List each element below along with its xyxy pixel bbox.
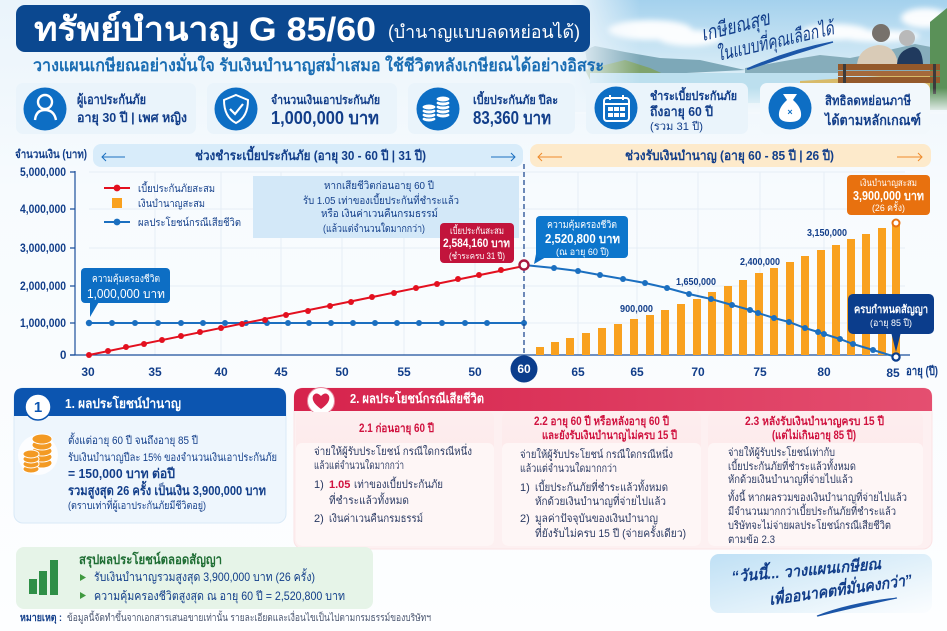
icon: shield <box>214 88 258 130</box>
banner: premium payment period: ช่วงชำระเบี้ยประกันภัย (อายุ 30 - 60 ปี | 31 ปี) <box>195 145 426 164</box>
sub-panel 2.1 <box>296 412 494 546</box>
y axis: 5,000,000 <box>20 167 66 179</box>
sub-panel 2.2: จ่ายให้ผู้รับประโยชน์ กรณีใดกรณีหนึ่ง <box>520 446 673 461</box>
bar value labels: 900,000 <box>620 303 653 315</box>
card: premium period: ถึงอายุ 60 ปี <box>650 104 713 120</box>
callout: cumulative premium 2,584,160: 2,584,160 บาท <box>443 238 510 250</box>
y axis: 1,000,000 <box>20 318 66 330</box>
card: premium period: (รวม 31 ปี) <box>650 120 703 133</box>
card: tax deduction <box>760 83 930 134</box>
sub-panel 2.3: จ่ายให้ผู้รับประโยชน์เท่ากับ <box>728 445 835 459</box>
badge: heart <box>308 388 334 414</box>
info box: death before age 60 <box>253 176 519 238</box>
card: sum insured: จำนวนเงินเอาประกันภัย <box>271 93 380 107</box>
sub-panel 2.3: 2.3 หลังรับเงินบำนาญครบ 15 ปี <box>745 414 884 428</box>
sub-panel 2.3: ทั้งนี้ หากผลรวมของเงินบำนาญที่จ่ายไปแล้ว <box>728 489 907 504</box>
bar value labels: 1,650,000 <box>676 276 716 288</box>
icon: woman seen from behind <box>897 30 923 64</box>
x axis: 80 <box>817 365 831 379</box>
icon: person <box>24 88 66 130</box>
callout: cumulative pension 3,900,000: เงินบำนาญสะสม <box>860 178 917 189</box>
marker: age 60 premium peak <box>520 260 528 270</box>
x axis: 65 <box>571 365 585 379</box>
pension details: ตั้งแต่อายุ 60 ปี จนถึงอายุ 85 ปี <box>68 432 198 447</box>
sub-panel 2.2: หักด้วยเงินบำนาญที่จ่ายไปแล้ว <box>535 493 666 508</box>
bar value labels: 2,400,000 <box>740 256 780 268</box>
sub-panel 2.2: และยังรับเงินบำนาญไม่ครบ 15 ปี <box>542 428 677 442</box>
sub-panel 2.1: เงินค่าเวนคืนกรมธรรม์ <box>329 512 423 525</box>
sub-panel 2.1: 2) <box>314 513 324 525</box>
x axis: 35 <box>148 365 162 379</box>
footnote: หมายเหตุ : <box>20 613 62 624</box>
sub-panel 2.2: ที่ยังรับไม่ครบ 15 ปี (จ่ายครั้งเดียว) <box>535 525 686 540</box>
sub-panel 2.1: แล้วแต่จำนวนใดมากกว่า <box>314 459 404 472</box>
card: insured person: อายุ 30 ปี | เพศ หญิง <box>77 110 187 126</box>
banner: pension receiving period: ช่วงรับเงินบำนาญ (อายุ 60 - 85 ปี | 26 ปี) <box>625 148 834 164</box>
footnote: ข้อมูลนี้จัดทำขึ้นจากเอกสารเสนอขายเท่านั้น รายละเอียดและเงื่อนไขเป็นไปตามกรมธรรม์ของบริษัทฯ <box>67 610 431 624</box>
quote box <box>710 552 932 616</box>
legend: เบี้ยประกันภัยสะสม <box>138 181 215 195</box>
pension details: รับเงินบำนาญปีละ 15% ของจำนวนเงินเอาประกันภัย <box>68 451 277 464</box>
photo: couple on a bench by a lake <box>570 0 947 114</box>
badge: number 1 <box>25 394 51 420</box>
sub-panel 2.3: เบี้ยประกันภัยที่ชำระแล้วทั้งหมด <box>728 458 856 473</box>
sub-panel 2.3 <box>708 412 923 546</box>
badge: number 1: 1 <box>34 399 42 416</box>
callout: life cover 1,000,000: 1,000,000 บาท <box>87 287 165 301</box>
callout: cumulative premium 2,584,160 <box>440 223 514 263</box>
line: death benefit flat <box>86 320 527 326</box>
sub-panel 2.1: 1.05 <box>329 479 350 491</box>
callout: cumulative premium 2,584,160: (ชำระครบ 31 ปี) <box>449 251 505 261</box>
bullet: maximum pension <box>80 568 315 585</box>
slogan: retirement script: เกษียณสุข <box>699 7 773 47</box>
y axis <box>20 167 75 362</box>
quote box: เพื่ออนาคตที่มั่นคงกว่า” <box>768 568 913 609</box>
info box: death before age 60: รับ 1.05 เท่าของเบี้ยประกันที่ชำระแล้ว <box>303 193 459 207</box>
slogan swoosh <box>747 42 833 69</box>
marker: pension peak <box>892 220 900 226</box>
sub-panel 2.3: (แต่ไม่เกินอายุ 85 ปี) <box>772 428 856 443</box>
pension details: = 150,000 บาท ต่อปี <box>68 466 175 481</box>
x axis: 40 <box>214 365 228 379</box>
info box: death before age 60: (แล้วแต่จำนวนใดมากกว่า) <box>323 222 425 235</box>
callout: cumulative pension 3,900,000 <box>847 175 930 215</box>
sub-panel 2.3: มีจำนวนมากกว่าเบี้ยประกันภัยที่ชำระแล้ว <box>728 503 896 518</box>
pension bars <box>536 223 900 355</box>
title bar: ทรัพย์บำนาญ G 85/60 <box>34 10 376 48</box>
sub-panel 2.1: ที่ชำระแล้วทั้งหมด <box>329 492 409 507</box>
line: cumulative premium <box>86 266 524 358</box>
sub-panel 2.3: หักด้วยเงินบำนาญที่จ่ายไปแล้ว <box>728 471 853 486</box>
sub-panel 2.2: 2) <box>520 513 530 525</box>
y axis: 0 <box>60 350 66 362</box>
y axis: 4,000,000 <box>20 204 66 216</box>
panel 1: pension benefit: 1. ผลประโยชน์บำนาญ <box>65 395 181 412</box>
legend: เงินบำนาญสะสม <box>138 198 205 210</box>
x axis: 70 <box>691 365 705 379</box>
info box: death before age 60: หรือ เงินค่าเวนคืนกรมธรรม์ <box>321 207 438 220</box>
icon: green bar chart <box>29 560 58 595</box>
x axis: 45 <box>274 365 288 379</box>
bar value labels: 3,150,000 <box>807 227 847 239</box>
callout: life cover 1,000,000 <box>81 268 170 317</box>
footnote <box>20 610 431 624</box>
panel 2: death benefit <box>294 388 932 549</box>
icon: man seen from behind <box>857 24 898 64</box>
panel 2: death benefit: 2. ผลประโยชน์กรณีเสียชีวิต <box>350 390 484 406</box>
sub-panel 2.3: บริษัทจะไม่จ่ายผลประโยชน์กรณีเสียชีวิต <box>728 518 891 532</box>
card: sum insured <box>207 83 397 134</box>
grid lines <box>89 172 905 355</box>
bullet: maximum pension: รับเงินบำนาญรวมสูงสุด 3,900,000 บาท (26 ครั้ง) <box>94 568 315 585</box>
card: insured person: ผู้เอาประกันภัย <box>77 92 146 108</box>
x axis: 50 <box>335 365 349 379</box>
banner: pension receiving period <box>530 144 931 167</box>
sub-panel 2.1: 2.1 ก่อนอายุ 60 ปี <box>359 422 434 436</box>
bullet: maximum life cover: ความคุ้มครองชีวิตสูงสุด ณ อายุ 60 ปี = 2,520,800 บาท <box>94 589 345 604</box>
sub-panel 2.1: จ่ายให้ผู้รับประโยชน์ กรณีใดกรณีหนึ่ง <box>314 443 472 458</box>
callout: cumulative pension 3,900,000: 3,900,000 บาท <box>853 189 924 203</box>
marker: contract end <box>892 353 900 361</box>
pension details: (ตราบเท่าที่ผู้เอาประกันภัยมีชีวิตอยู่) <box>68 498 206 512</box>
x axis: 50 <box>468 365 482 379</box>
icon: money bag <box>768 86 812 130</box>
callout: contract end: (อายุ 85 ปี) <box>870 317 912 329</box>
callout: life cover 2,520,800 <box>534 216 628 264</box>
dashed line at age 60 <box>523 164 525 356</box>
pension details: รวมสูงสุด 26 ครั้ง เป็นเงิน 3,900,000 บาท <box>68 480 266 499</box>
x axis: 55 <box>397 365 411 379</box>
panel: lifetime benefit summary: สรุปผลประโยชน์ตลอดสัญญา <box>79 550 222 568</box>
icon: gold coins <box>18 434 58 475</box>
x axis: อายุ (ปี) <box>906 364 938 379</box>
line: death benefit declining <box>524 265 896 357</box>
age 60 badge <box>510 356 538 382</box>
x axis <box>70 355 938 380</box>
sub-panel 2.2: เบี้ยประกันภัยที่ชำระแล้วทั้งหมด <box>535 479 668 494</box>
title bar <box>16 5 590 52</box>
icon: money bag: × <box>787 107 793 117</box>
sub-panel 2.2 <box>502 412 701 546</box>
quote box: “วันนี้... วางแผนเกษียณ <box>731 552 882 586</box>
card: annual premium: เบี้ยประกันภัย ปีละ <box>473 90 558 107</box>
y axis label: จำนวนเงิน (บาท) <box>15 147 87 161</box>
y axis: 3,000,000 <box>20 243 66 255</box>
banner: premium payment period <box>93 144 523 167</box>
callout: contract end: ครบกำหนดสัญญา <box>854 303 928 316</box>
info box: death before age 60: หากเสียชีวิตก่อนอายุ 60 ปี <box>324 179 434 192</box>
x axis: 30 <box>81 365 95 379</box>
card: annual premium <box>408 83 575 134</box>
legend: ผลประโยชน์กรณีเสียชีวิต <box>138 216 241 229</box>
title bar: (บำนาญแบบลดหย่อนได้) <box>388 21 580 42</box>
slogan: retirement script: ในแบบที่คุณเลือกได้ <box>714 14 839 66</box>
card: sum insured: 1,000,000 บาท <box>271 108 379 128</box>
subtitle: วางแผนเกษียณอย่างมั่นใจ รับเงินบำนาญสม่ำเสมอ ใช้ชีวิตหลังเกษียณได้อย่างอิสระ <box>33 53 604 76</box>
callout: life cover 2,520,800: 2,520,800 บาท <box>545 232 620 246</box>
card: premium period <box>586 83 748 134</box>
callout: cumulative premium 2,584,160: เบี้ยประกันสะสม <box>450 224 504 237</box>
sub-panel 2.1: เท่าของเบี้ยประกันภัย <box>354 476 443 491</box>
legend <box>104 181 241 229</box>
age 60 badge: 60 <box>517 362 531 376</box>
x axis: 65 <box>630 365 644 379</box>
sub-panel 2.3: ตามข้อ 2.3 <box>728 534 775 546</box>
slogan: retirement script <box>699 7 839 66</box>
chart: premium, pension and death benefit <box>15 144 938 382</box>
icon: wooden bench <box>838 64 940 94</box>
x axis: 85 <box>886 366 900 380</box>
pension details <box>68 432 277 512</box>
sub-panel 2.2: 2.2 อายุ 60 ปี หรือหลังอายุ 60 ปี <box>534 415 669 429</box>
card: tax deduction: สิทธิลดหย่อนภาษี <box>825 93 911 108</box>
card: tax deduction: ได้ตามหลักเกณฑ์ <box>823 111 921 128</box>
icon: coins <box>416 88 460 130</box>
card: annual premium: 83,360 บาท <box>473 108 551 128</box>
bar value labels <box>620 227 847 315</box>
y axis: 2,000,000 <box>20 281 66 293</box>
sub-panel 2.2: มูลค่าปัจจุบันของเงินบำนาญ <box>535 513 658 525</box>
card: premium period: ชำระเบี้ยประกันภัย <box>650 86 737 103</box>
callout: life cover 2,520,800: (ณ อายุ 60 ปี) <box>556 246 609 258</box>
x axis: 75 <box>753 365 767 379</box>
card: insured person <box>16 83 196 134</box>
sub-panel 2.1: 1) <box>314 479 324 491</box>
panel 1: pension benefit <box>14 388 286 523</box>
callout: cumulative pension 3,900,000: (26 ครั้ง) <box>872 201 905 214</box>
callout: life cover 1,000,000: ความคุ้มครองชีวิต <box>92 273 160 285</box>
icon: calendar <box>594 86 638 130</box>
callout: life cover 2,520,800: ความคุ้มครองชีวิต <box>547 219 617 231</box>
panel: lifetime benefit summary <box>16 547 373 609</box>
callout: contract end <box>848 294 934 352</box>
sub-panel 2.2: 1) <box>520 482 530 494</box>
sub-panel 2.2: แล้วแต่จำนวนใดมากกว่า <box>520 462 617 475</box>
